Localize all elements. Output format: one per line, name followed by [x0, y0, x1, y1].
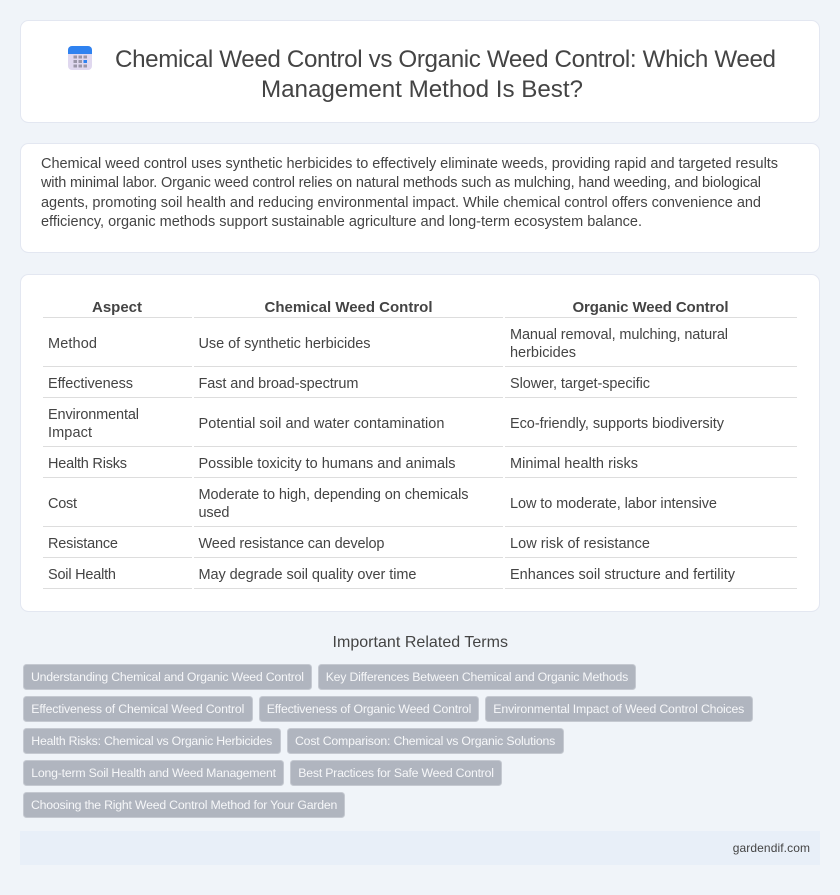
tag: Effectiveness of Organic Weed Control — [267, 702, 471, 716]
tag: Long-term Soil Health and Weed Management — [31, 766, 277, 780]
row: cost — [48, 487, 717, 521]
row: effectiveness: Effectiveness — [48, 376, 133, 392]
row: environmental impact — [48, 407, 725, 441]
table header row: Aspect — [92, 299, 142, 316]
tag: Effectiveness of Chemical Weed Control — [31, 702, 244, 716]
intro paragraph: with minimal labor. Organic weed control relies on natural methods such as mulching, hand weeding, and biological — [40, 175, 761, 191]
row: method: Use of synthetic herbicides — [198, 336, 370, 352]
intro paragraph: efficiency, organic methods support sustainable agriculture and long-term ecosystem balance. — [41, 214, 642, 230]
tag — [288, 728, 564, 754]
footer bar: gardendif.com — [733, 841, 810, 855]
tag: Key Differences Between Chemical and Organic Methods — [326, 670, 628, 684]
tag — [24, 696, 252, 722]
row: health risks: Minimal health risks — [510, 456, 638, 472]
row: health risks — [48, 456, 638, 472]
panel: comparison table card — [20, 274, 820, 612]
tag: Health Risks: Chemical vs Organic Herbicides — [31, 734, 272, 748]
row: soil health: Soil Health — [48, 567, 116, 583]
icon: calendar — [68, 46, 92, 70]
row: effectiveness: Slower, target-specific — [510, 376, 650, 392]
tag: Choosing the Right Weed Control Method for Your Garden — [31, 798, 337, 812]
row: method: Manual removal, mulching, natural — [510, 327, 728, 343]
table header row: Organic Weed Control — [572, 299, 728, 316]
row: cost: Low to moderate, labor intensive — [510, 496, 717, 512]
row: effectiveness: Fast and broad-spectrum — [198, 376, 358, 392]
tag — [24, 728, 280, 754]
row: resistance: Weed resistance can develop — [198, 536, 384, 552]
row: method: herbicides — [510, 345, 576, 361]
table header row: Chemical Weed Control — [264, 299, 432, 316]
row: soil health: Enhances soil structure and fertility — [510, 567, 736, 583]
row: cost: Cost — [48, 496, 77, 512]
row: method: Method — [48, 336, 97, 352]
row: resistance: Low risk of resistance — [510, 536, 650, 552]
row: resistance: Resistance — [48, 536, 118, 552]
tag — [290, 760, 502, 786]
row: environmental impact: Impact — [48, 425, 92, 441]
tag — [260, 696, 478, 722]
row: environmental impact: Eco-friendly, supports biodiversity — [510, 416, 725, 432]
panel: intro text card — [20, 144, 820, 252]
heading: important related terms: Important Related Terms — [332, 634, 508, 651]
tag — [318, 664, 636, 690]
intro paragraph: Chemical weed control uses synthetic herbicides to effectively eliminate weeds, providing rapid and targeted results — [41, 156, 778, 172]
row: resistance — [48, 536, 650, 552]
intro paragraph — [40, 156, 778, 230]
panel: header card — [20, 20, 820, 122]
row: health risks: Possible toxicity to humans and animals — [198, 456, 456, 472]
tag: Best Practices for Safe Weed Control — [298, 766, 494, 780]
row: environmental impact: Environmental — [48, 407, 139, 423]
footer bar — [20, 831, 820, 865]
row: effectiveness — [48, 376, 650, 392]
row: environmental impact: Potential soil and water contamination — [198, 416, 444, 432]
related terms tags — [24, 664, 752, 818]
tag — [24, 792, 344, 818]
row: soil health: May degrade soil quality over time — [198, 567, 416, 583]
title — [115, 46, 776, 103]
tag: Cost Comparison: Chemical vs Organic Solutions — [295, 734, 555, 748]
tag — [24, 760, 284, 786]
row: soil health — [48, 567, 736, 583]
tag — [486, 696, 752, 722]
tag: Understanding Chemical and Organic Weed Control — [31, 670, 304, 684]
row: method — [48, 327, 728, 361]
tag — [24, 664, 312, 690]
row: cost: used — [198, 505, 230, 521]
table header row — [92, 299, 728, 316]
title: Chemical Weed Control vs Organic Weed Control: Which Weed — [115, 46, 776, 73]
title: Management Method Is Best? — [261, 76, 583, 103]
tag: Environmental Impact of Weed Control Choices — [493, 702, 744, 716]
row: health risks: Health Risks — [48, 456, 127, 472]
row: cost: Moderate to high, depending on chemicals — [198, 487, 468, 503]
intro paragraph: agents, promoting soil health and reducing environmental impact. While chemical control offers convenience and — [41, 195, 761, 211]
